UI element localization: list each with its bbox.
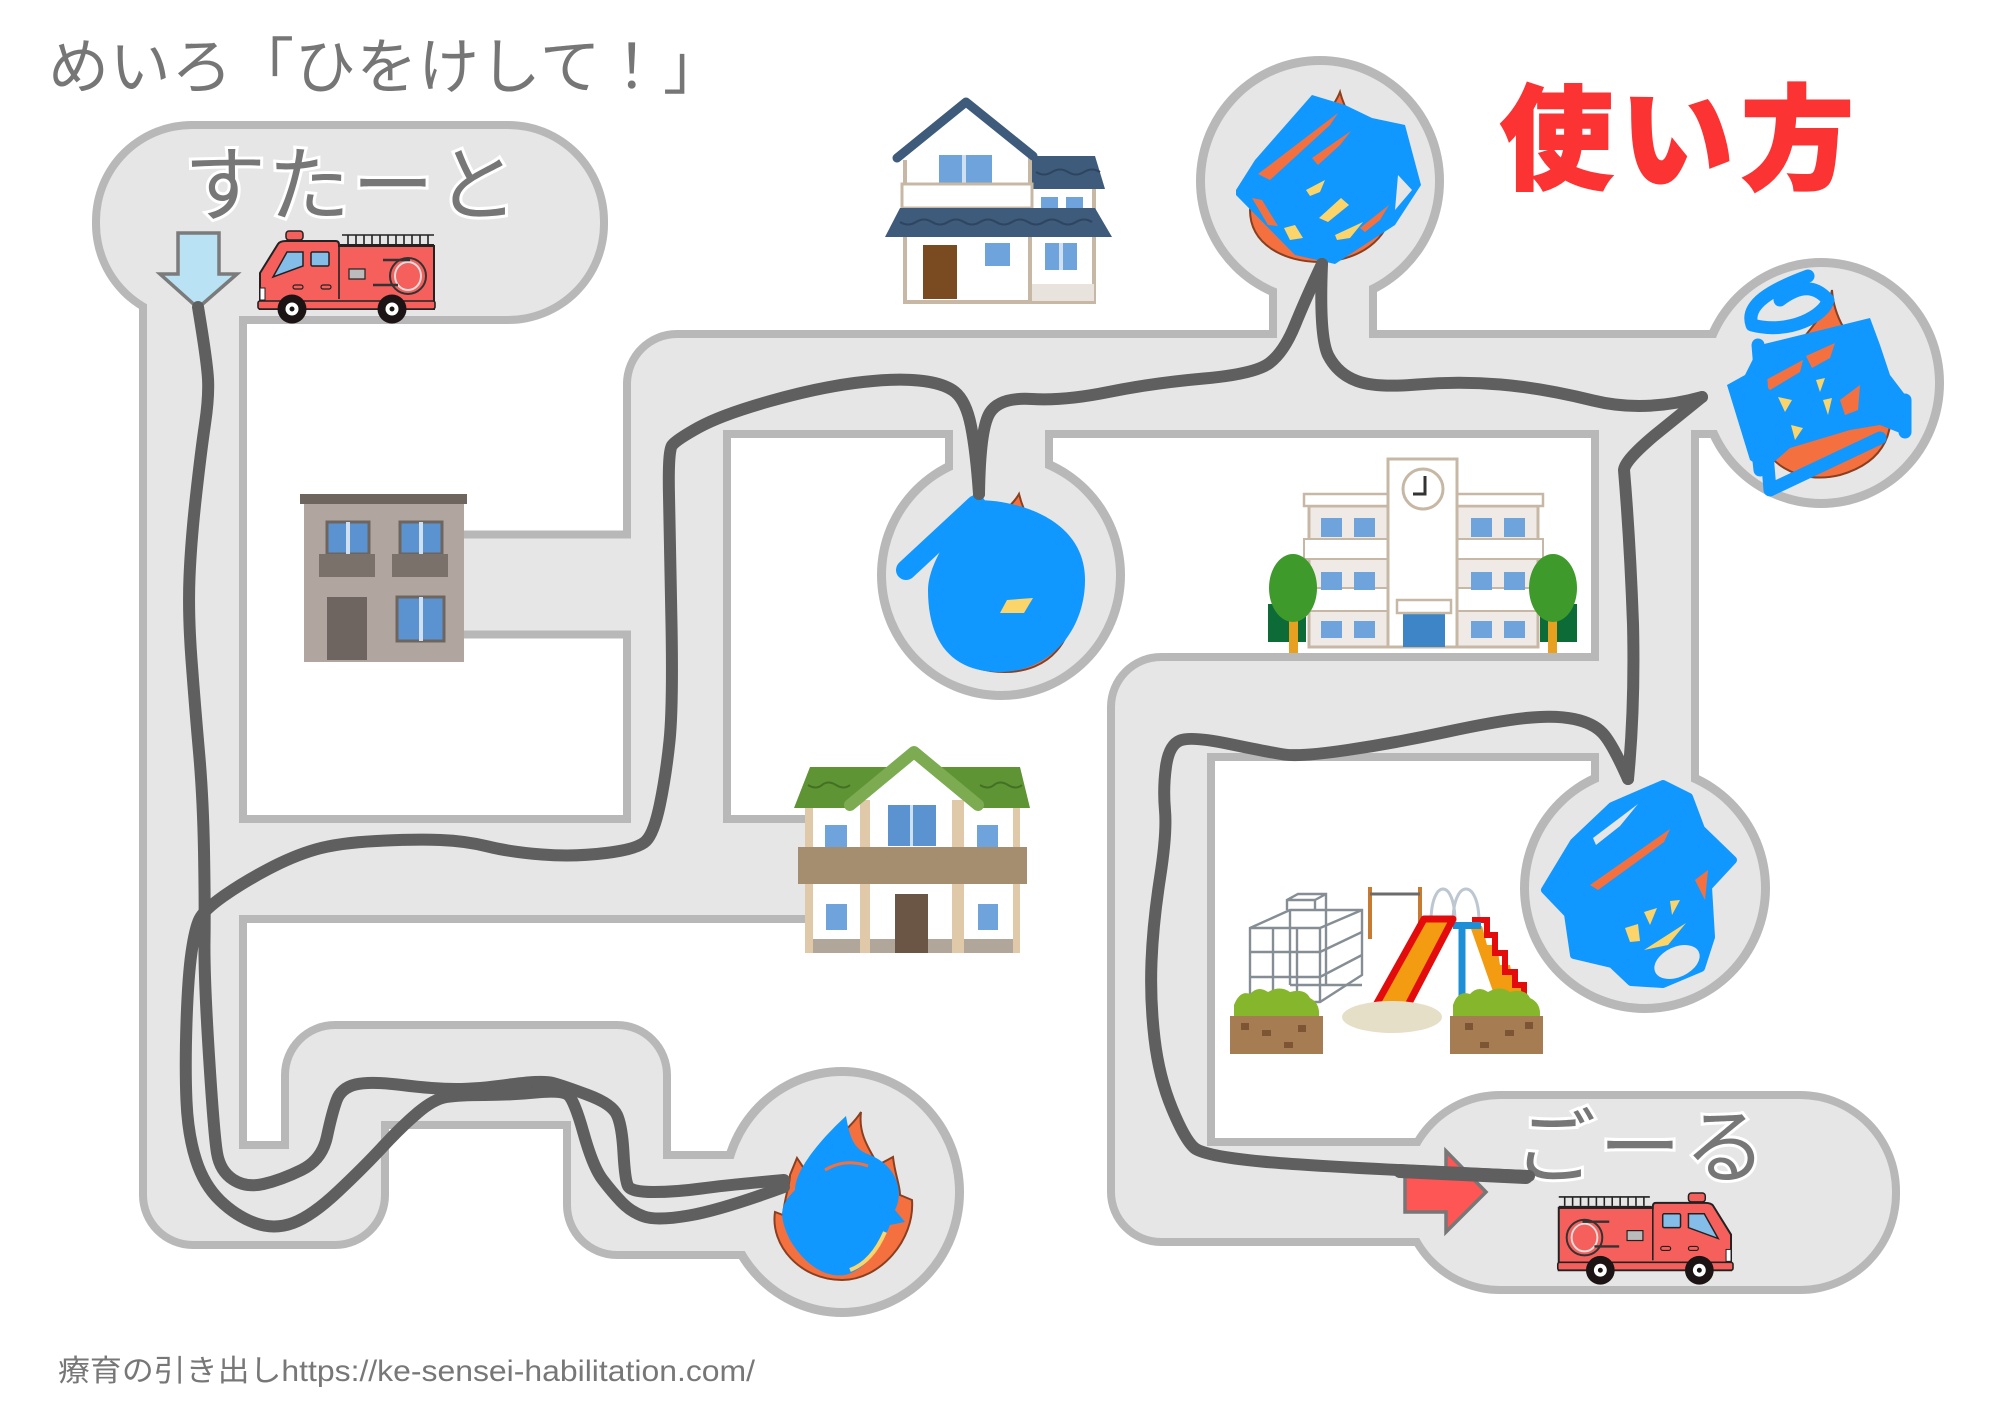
stairs — [1470, 926, 1523, 1000]
footer credit: 療育の引き出しhttps://ke-sensei-habilitation.com/ — [58, 1355, 756, 1388]
illustration: playground — [1230, 887, 1543, 1054]
icon: fire truck at goal — [1558, 1193, 1733, 1285]
illustration: blue roof house — [885, 102, 1112, 302]
illustration: green roof house — [794, 752, 1030, 953]
icon: goal arrow — [1405, 1151, 1486, 1232]
iron bar — [1370, 887, 1420, 939]
jungle gym — [1250, 894, 1362, 1002]
hill right — [1453, 988, 1540, 1016]
hose: drawn answer line — [186, 264, 1702, 1226]
slide arches — [1431, 889, 1479, 922]
icon: start arrow — [160, 233, 237, 308]
fire 1: scribbled out, top — [1236, 92, 1421, 264]
hill left — [1234, 988, 1319, 1016]
fire 3: scribbled out, right — [1727, 276, 1909, 490]
heading: how to use: 使い方 — [1500, 78, 1854, 204]
start label: すたーと — [184, 141, 518, 232]
slide — [1376, 919, 1453, 1005]
title: めいろ「ひをけして！」 — [48, 33, 724, 101]
fire 2: scribbled out, middle — [906, 494, 1085, 672]
sand — [1342, 1001, 1442, 1033]
fire 4: scribbled out, lower right — [1545, 784, 1733, 986]
goal label: ごーる — [1514, 1103, 1766, 1194]
illustration: grey apartment — [300, 494, 467, 662]
fire 5: scribbled out, bottom — [774, 1112, 912, 1280]
icon: fire truck at start — [258, 231, 435, 324]
illustration: school — [1268, 459, 1577, 653]
